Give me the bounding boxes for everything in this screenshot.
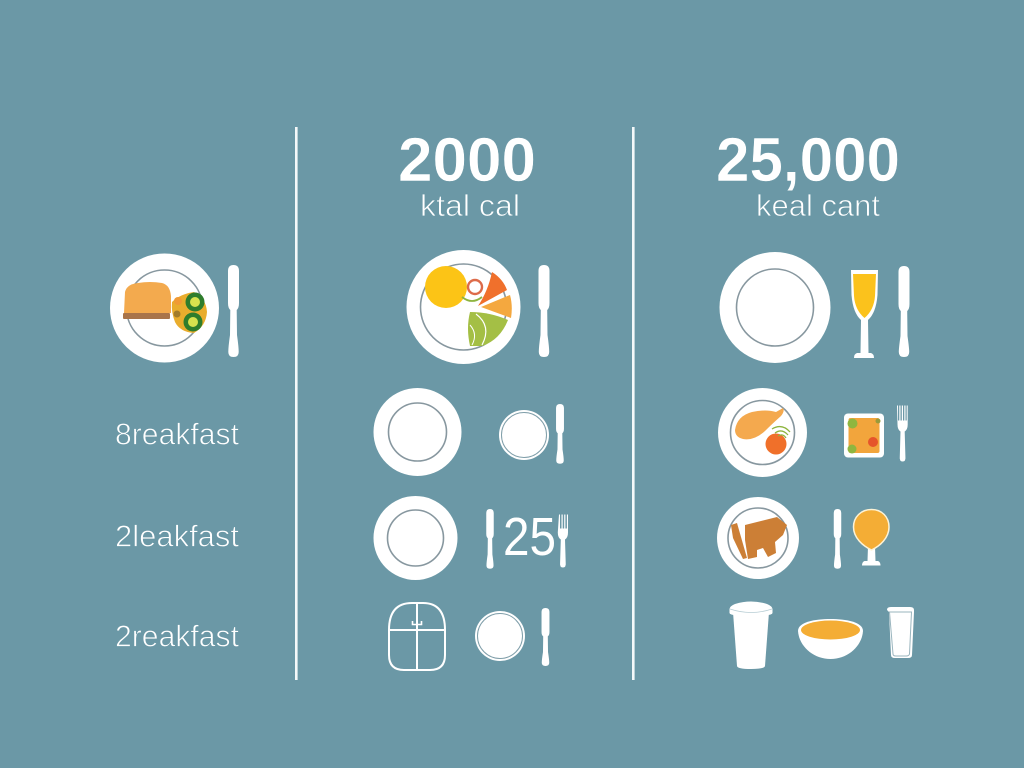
icon: outlined container — [389, 603, 445, 670]
label: row one: 8reakfast — [115, 416, 239, 452]
icon: small knife — [834, 509, 841, 569]
icon: small plate — [499, 410, 549, 460]
subheading: ktal cal: ktal cal — [420, 188, 520, 223]
subheading: keal cant: keal cant — [756, 188, 880, 223]
icon: knife — [538, 265, 550, 357]
icon: empty plate — [374, 496, 458, 580]
heading: 2000: 2000 — [398, 126, 536, 195]
icon: soup bowl — [798, 619, 863, 659]
icon: fork — [897, 406, 908, 462]
icon: breakfast plate with toast and omelet — [110, 254, 219, 362]
heading: 25,000: 25,000 — [716, 126, 900, 195]
panel: 2000 calories column — [374, 126, 568, 670]
icon: square dish — [844, 414, 884, 458]
icon: small knife — [556, 404, 564, 464]
icon: small plate — [475, 611, 525, 661]
icon: large empty plate — [720, 252, 830, 363]
icon: knife — [228, 265, 239, 357]
icon: plate with chicken leg — [718, 388, 807, 477]
number: 25: 25 — [503, 507, 556, 567]
icon: small knife — [542, 608, 549, 666]
icon: plate with meat — [717, 497, 799, 579]
panel: 25,000 calories column — [716, 126, 914, 669]
icon: small knife — [486, 509, 494, 569]
panel: meal labels column — [110, 254, 239, 654]
icon: plate with fruit wedges — [406, 250, 520, 364]
icon: round wine glass — [854, 510, 889, 566]
icon: drinking glass — [887, 607, 914, 658]
icon: knife — [898, 266, 910, 357]
icon: champagne glass — [851, 270, 878, 358]
label: row three: 2reakfast — [115, 618, 239, 654]
label: row two: 2leakfast — [115, 518, 239, 554]
icon: takeaway cup — [730, 602, 772, 669]
icon: empty plate — [374, 388, 462, 476]
icon: fork — [558, 514, 568, 568]
